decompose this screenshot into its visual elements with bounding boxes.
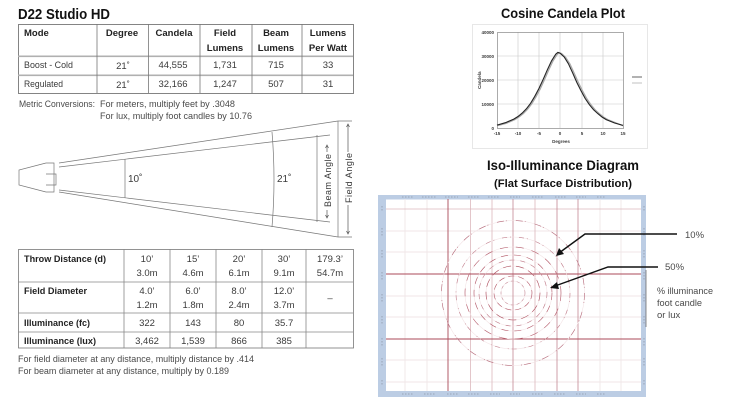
y axis labels: 20000: [481, 78, 494, 83]
y axis labels: [477, 30, 494, 131]
table: throw distance: 322: [139, 318, 155, 329]
beam angle diagram: [19, 121, 354, 237]
y axis labels: 40000: [481, 30, 494, 35]
axis ticks: [382, 197, 644, 394]
heading: Cosine Candela Plot: Cosine Candela Plot: [501, 5, 625, 21]
table: modes and lumens: 44,555: [158, 60, 188, 71]
table: modes and lumens: Lumens: [207, 43, 243, 54]
table: throw distance: 35.7: [275, 318, 293, 329]
legend text: illuminance units: or lux: [657, 310, 680, 321]
beam angle diagram: 10˚: [128, 173, 142, 185]
text: diameter notes: For beam diameter at any distance, multiply by 0.189: [18, 366, 229, 377]
table: throw distance: 20’: [233, 254, 245, 265]
text: diameter notes: [18, 354, 254, 377]
table: throw distance: 12.0’: [274, 286, 294, 297]
x axis labels: -10: [515, 131, 522, 136]
subheading: flat surface distribution: (Flat Surface Distribution): [494, 178, 632, 190]
table: throw distance: 2.4m: [228, 300, 250, 311]
table: throw distance: 4.0’: [139, 286, 155, 297]
table: modes and lumens: Lumens: [258, 43, 294, 54]
icon: fixture nose: [19, 163, 56, 192]
table: modes and lumens: 507: [268, 79, 284, 90]
text: metric conversions: For lux, multiply foot candles by 10.76: [100, 111, 252, 122]
y axis labels: 0: [491, 126, 494, 131]
arrow: 50% callout: [550, 267, 658, 289]
text: metric conversions: For meters, multiply feet by .3048: [100, 99, 235, 110]
table: throw distance: 179.3’: [317, 254, 343, 265]
table: throw distance: 143: [185, 318, 201, 329]
table: throw distance: 385: [276, 336, 292, 347]
table: throw distance: 30’: [278, 254, 290, 265]
table: modes and lumens: Field: [214, 28, 236, 39]
table: modes and lumens: Regulated: [24, 79, 63, 90]
table: modes and lumens: [18, 24, 354, 94]
legend text: illuminance units: [657, 286, 713, 321]
table: throw distance: 3.0m: [136, 268, 158, 279]
table: modes and lumens: Boost - Cold: [24, 60, 73, 71]
table: throw distance: 3.7m: [273, 300, 295, 311]
arrow: 10% callout: [556, 234, 677, 256]
table: modes and lumens: 21˚: [116, 80, 130, 91]
table: throw distance: Throw Distance (d): [24, 254, 106, 265]
text: metric conversions: [19, 99, 252, 122]
chart: cosine candela plot: [472, 24, 648, 148]
table: modes and lumens: Degree: [106, 28, 138, 39]
beam angle diagram: 21˚: [277, 173, 291, 185]
table: modes and lumens: Mode: [24, 28, 49, 39]
x axis labels: 0: [559, 131, 562, 136]
table: throw distance: 54.7m: [317, 268, 343, 279]
beam angle diagram: Beam Angle: [323, 154, 333, 207]
table: modes and lumens: 31: [323, 79, 333, 90]
table: throw distance: Illuminance (fc): [24, 318, 90, 329]
beam and field extents: [317, 121, 352, 237]
table: modes and lumens: 1,731: [213, 60, 237, 71]
table: modes and lumens: 715: [268, 60, 284, 71]
table: throw distance: 6.0’: [185, 286, 201, 297]
table: throw distance: 10’: [141, 254, 153, 265]
gray curve: [498, 53, 623, 126]
table: modes and lumens: 33: [323, 60, 333, 71]
y axis labels: Candela: [477, 71, 482, 89]
table: throw distance: 15’: [187, 254, 199, 265]
angle arcs: [125, 132, 274, 227]
x axis labels: [494, 131, 626, 144]
iso contours: [442, 220, 584, 366]
table: modes and lumens: 21˚: [116, 61, 130, 72]
table: throw distance: 4.6m: [182, 268, 204, 279]
heading: Iso-Illuminance Diagram: Iso-Illuminance Diagram: [487, 158, 639, 173]
x axis labels: 5: [581, 131, 584, 136]
table: modes and lumens: 1,247: [213, 79, 237, 90]
table: throw distance: Illuminance (lux): [24, 336, 96, 347]
beam angle lines: [59, 135, 330, 222]
table: throw distance: 1.2m: [136, 300, 158, 311]
x axis labels: -5: [537, 131, 541, 136]
table: modes and lumens: Lumens: [310, 28, 346, 39]
table: throw distance: 3,462: [135, 336, 159, 347]
red grid: [386, 199, 641, 391]
table: modes and lumens: Per Watt: [309, 43, 348, 54]
light grid: [386, 199, 641, 391]
x axis labels: 10: [600, 131, 606, 136]
table: throw distance: 80: [234, 318, 244, 329]
table: throw distance: [18, 249, 354, 348]
black curve: [497, 52, 623, 125]
title: D22 Studio HD: D22 Studio HD: [18, 7, 110, 23]
text: metric conversions: Metric Conversions:: [19, 99, 95, 110]
legend text: illuminance units: % illuminance: [657, 286, 713, 297]
x axis labels: Degrees: [552, 139, 570, 144]
x axis labels: -15: [494, 131, 501, 136]
label: 10%: 10%: [685, 230, 705, 241]
table: throw distance: 1,539: [181, 336, 205, 347]
table: modes and lumens: Candela: [156, 28, 193, 39]
table: throw distance: 6.1m: [228, 268, 250, 279]
table: modes and lumens: Beam: [263, 28, 289, 39]
table: throw distance: 9.1m: [273, 268, 295, 279]
y axis labels: 10000: [481, 102, 494, 107]
beam angle diagram: Field Angle: [344, 153, 354, 203]
chart: iso-illuminance diagram: [378, 195, 646, 397]
legend text: illuminance units: foot candle: [657, 298, 702, 309]
table: modes and lumens: 32,166: [158, 79, 188, 90]
label: 50%: 50%: [665, 262, 685, 273]
y axis labels: 30000: [481, 54, 494, 59]
table: throw distance: 866: [231, 336, 247, 347]
table: throw distance: –: [327, 293, 333, 304]
field angle lines: [59, 121, 338, 237]
text: diameter notes: For field diameter at any distance, multiply distance by .414: [18, 354, 254, 365]
table: throw distance: 8.0’: [231, 286, 247, 297]
table: throw distance: Field Diameter: [24, 286, 87, 297]
legend: [632, 76, 642, 78]
x axis labels: 15: [620, 131, 626, 136]
table: throw distance: 1.8m: [182, 300, 204, 311]
